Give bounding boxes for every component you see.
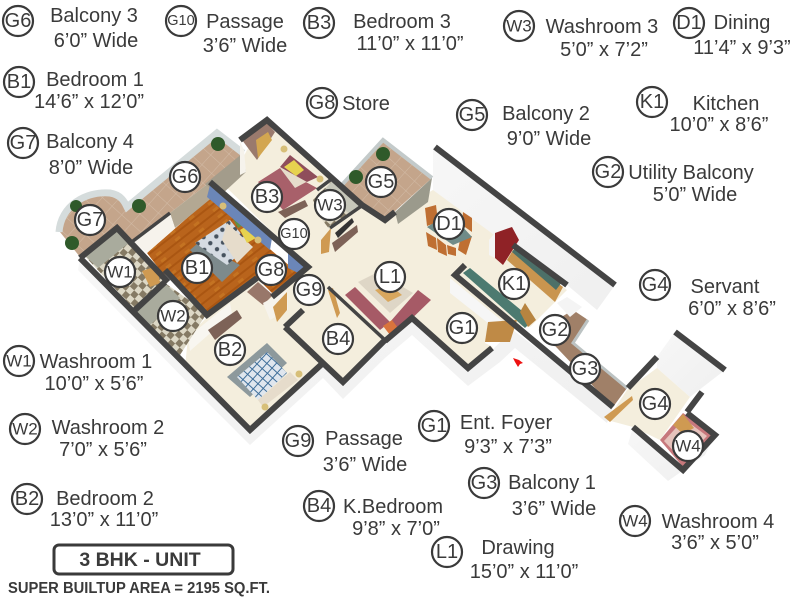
balcony 2 railing [340, 140, 432, 187]
plan marker G6: G6 [172, 166, 198, 188]
kitchen granite back [512, 245, 562, 290]
legend: Washroom 3: W3 [506, 16, 532, 36]
legend: Balcony 1: Balcony 1 [508, 472, 596, 494]
legend: Bedroom 3 [304, 8, 464, 55]
plan marker L1 [375, 262, 405, 292]
legend: Store [307, 88, 390, 118]
plan marker G3: G3 [572, 358, 598, 380]
legend: Passage G9: Passage [325, 428, 403, 450]
legend: Washroom 2: Washroom 2 [52, 417, 164, 439]
bedroom 2 bed [227, 343, 302, 410]
bedroom 2 tv unit [208, 310, 242, 340]
panel: balcony 3 and 4 tile floor [60, 135, 243, 257]
plan marker W4: W4 [675, 436, 701, 456]
legend: Servant: 6’0” x 8’6” [688, 298, 776, 320]
service door [604, 396, 633, 422]
legend: Balcony 4: Balcony 4 [46, 131, 134, 153]
plan marker W4 [673, 431, 703, 461]
plan marker W3 [315, 190, 345, 220]
legend: Washroom 1: 10’0” x 5’6” [45, 373, 143, 395]
legend: Drawing: Drawing [481, 537, 555, 559]
entrance arrow [513, 358, 523, 367]
legend: Balcony 3: Balcony 3 [50, 5, 138, 27]
legend: Washroom 2 [10, 414, 164, 461]
servant door [673, 414, 694, 434]
legend: K.Bedroom: B4 [307, 495, 331, 517]
plan marker G2: G2 [542, 319, 568, 341]
bedroom 1 white wall [133, 213, 175, 253]
legend: Washroom 3 [504, 11, 658, 61]
plan marker G5: G5 [368, 171, 394, 193]
legend: Passage G9: 3’6” Wide [323, 454, 407, 476]
legend: Kitchen: K1 [640, 91, 664, 113]
balcony 2 sliding door [395, 178, 432, 224]
legend: Bedroom 3: B3 [307, 12, 331, 34]
legend: Passage G9 [283, 426, 407, 476]
unit title box: 3 BHK - UNIT [79, 549, 201, 571]
panel: balcony 2 floor [340, 140, 432, 220]
store door [273, 292, 287, 322]
washroom 1 wall [82, 228, 130, 268]
legend: Passage G10: Passage [206, 11, 284, 33]
bedroom 3 bed [258, 146, 324, 218]
plan marker B4: B4 [326, 328, 350, 350]
legend: Bedroom 1: Bedroom 1 [46, 69, 144, 91]
unit title box [54, 545, 233, 574]
legend: Dining: D1 [676, 12, 702, 34]
legend: Balcony 1: G3 [471, 472, 497, 494]
legend: Bedroom 1: B1 [7, 71, 31, 93]
exterior wall faces [78, 147, 725, 481]
bedroom 3 white stub [240, 142, 246, 175]
balcony 4 sliding door [170, 182, 214, 228]
legend: K.Bedroom [304, 491, 443, 540]
legend: Passage G10: 3’6” Wide [203, 35, 287, 57]
legend: Dining: Dining [714, 12, 770, 34]
legend: Servant [640, 270, 776, 320]
plan marker G6 [170, 162, 200, 192]
counter wall face [450, 278, 507, 336]
plan marker G7 [75, 205, 105, 235]
plan marker G10 [279, 219, 309, 249]
legend: Passage G9: G9 [285, 430, 311, 452]
panel: bedroom 2 white wall [188, 303, 232, 351]
dining table [425, 205, 472, 256]
legend: Drawing: L1 [436, 541, 458, 563]
legend: Utility Balcony: Utility Balcony [628, 162, 754, 184]
panel: bedroom 1 wood floor [147, 198, 298, 315]
legend: Balcony 2 [457, 100, 591, 150]
plan marker G4: G4 [642, 393, 668, 415]
legend: Bedroom 2 [12, 484, 158, 531]
plan marker D1 [434, 209, 464, 239]
legend: Utility Balcony: 5’0” Wide [653, 184, 737, 206]
washroom 3 door [321, 228, 331, 254]
plan marker W1 [105, 257, 135, 287]
legend: Kitchen [637, 87, 768, 136]
fridge [495, 227, 519, 265]
plants [65, 137, 390, 250]
legend: K.Bedroom: 9’8” x 7’0” [352, 518, 440, 540]
plan marker B4 [323, 324, 353, 354]
legend: Store: G8 [309, 92, 335, 114]
plan marker G5 [366, 167, 396, 197]
legend: Bedroom 1: 14’6” x 12’0” [34, 91, 144, 113]
plan marker B2: B2 [218, 339, 242, 361]
legend: Ent. Foyer: 9’3” x 7’3” [464, 436, 552, 458]
bedroom 3 wardrobe [242, 123, 275, 160]
panel: washroom 4 floor [660, 413, 715, 467]
panel: servant room floor [607, 368, 690, 440]
legend: Washroom 2: 7’0” x 5’6” [59, 439, 147, 461]
legend: Bedroom 3: Bedroom 3 [353, 11, 451, 33]
living room tv unit [332, 225, 358, 252]
walls [80, 120, 725, 470]
store white wall [263, 290, 288, 320]
legend: Dining: 11’4” x 9’3” [693, 37, 791, 59]
legend: Balcony 3: G6 [5, 10, 31, 32]
legend: Bedroom 2: B2 [15, 488, 39, 510]
fridge side [489, 233, 495, 258]
panel: washroom 1 floor [82, 228, 168, 308]
plan marker G9 [294, 275, 324, 305]
plan marker L1: L1 [379, 266, 401, 288]
store blue wall [288, 250, 308, 273]
legend: Servant: Servant [691, 276, 760, 298]
legend: Balcony 3 [3, 5, 138, 52]
legend: Passage G10 [166, 6, 287, 57]
kitchen counter back [507, 250, 563, 302]
plan marker G2 [540, 315, 570, 345]
legend: Washroom 1: W1 [6, 352, 32, 370]
legend: Passage G10: G10 [167, 13, 195, 29]
kitchen door [520, 303, 536, 327]
legend: Balcony 3: 6’0” Wide [54, 30, 138, 52]
legend: Store: Store [342, 93, 390, 115]
floor plan illustration [59, 120, 725, 481]
plan marker W1: W1 [107, 262, 133, 282]
plan marker K1 [499, 269, 529, 299]
legend: Washroom 1: Washroom 1 [40, 351, 152, 373]
bedroom 3 wardrobe door [256, 132, 272, 158]
plan marker B2 [215, 335, 245, 365]
plan marker G1: G1 [449, 317, 475, 339]
bedroom 1 rug [190, 243, 240, 282]
legend: Bedroom 3: 11’0” x 11’0” [356, 33, 464, 55]
legend: Utility Balcony: G2 [595, 161, 621, 183]
bedroom 1 bed [195, 185, 272, 265]
plan marker G3 [570, 354, 600, 384]
washroom 1 door [142, 266, 160, 287]
plan marker B1 [182, 253, 212, 283]
plan marker B3: B3 [255, 186, 279, 208]
plan marker G8: G8 [258, 259, 284, 281]
legend: Bedroom 2: Bedroom 2 [56, 488, 154, 510]
legend: Washroom 4: 3’6” x 5’0” [671, 532, 759, 554]
super builtup area: SUPER BUILTUP AREA = 2195 SQ.FT. [8, 580, 270, 597]
plan marker G1 [447, 313, 477, 343]
legend: Servant: G4 [642, 274, 668, 296]
legend: Balcony 2: 9’0” Wide [507, 128, 591, 150]
sofa set [345, 272, 431, 335]
plan marker G9: G9 [296, 279, 322, 301]
legend: Drawing: 15’0” x 11’0” [470, 561, 578, 583]
legend: Utility Balcony [593, 157, 754, 206]
utility cabinet [557, 297, 582, 317]
plan marker W2 [158, 301, 188, 331]
legend: Washroom 1 [4, 346, 152, 395]
balcony railing [59, 133, 243, 232]
washroom 3 wall [322, 180, 362, 214]
legend: Balcony 1 [469, 468, 596, 520]
entrance door [485, 320, 517, 342]
legend: Balcony 4: G7 [10, 132, 36, 154]
plan marker G4 [640, 389, 670, 419]
legend: Bedroom 1 [4, 67, 144, 113]
panel: utility balcony and balcony 1 floor [540, 310, 627, 407]
plan marker G10: G10 [280, 226, 308, 242]
panel: bedroom 4 floor [285, 287, 385, 382]
legend: Washroom 3: Washroom 3 [546, 16, 658, 38]
legend: Ent. Foyer: Ent. Foyer [460, 412, 552, 434]
legend: Dining [674, 8, 791, 59]
legend: Bedroom 2: 13’0” x 11’0” [50, 509, 158, 531]
legend: Drawing [432, 537, 578, 583]
plan marker G8 [256, 255, 286, 285]
store wardrobe [247, 282, 273, 305]
main floor: bedroom 3, living, dining, kitchen [227, 122, 567, 368]
legend: Washroom 4: W4 [622, 512, 648, 530]
utility railing [573, 320, 627, 388]
washroom 4 inner [664, 419, 707, 461]
legend: Ent. Foyer [419, 411, 552, 458]
panel: washroom 3 floor [313, 180, 362, 230]
washroom 2 wall [135, 283, 180, 325]
legend: Kitchen: Kitchen [693, 93, 759, 115]
plan marker B1: B1 [185, 257, 209, 279]
legend: Washroom 3: 5’0” x 7’2” [560, 39, 648, 61]
legend: Balcony 1: 3’6” Wide [512, 498, 596, 520]
bedroom 4 door [328, 288, 340, 318]
legend: Balcony 4 [8, 128, 134, 179]
plan marker W3: W3 [317, 196, 343, 214]
legend: Kitchen: 10’0” x 8’6” [670, 114, 768, 136]
legend: K.Bedroom: K.Bedroom [343, 496, 443, 518]
panel: bedroom 2 floor [185, 278, 323, 430]
legend: Washroom 4: Washroom 4 [662, 511, 774, 533]
legend: Balcony 2: G5 [459, 104, 485, 126]
legend: Balcony 4: 8’0” Wide [49, 157, 133, 179]
plan marker D1: D1 [436, 213, 462, 235]
legend: Washroom 2: W2 [12, 420, 38, 438]
balcony 3 sliding door [205, 153, 246, 195]
living room tv [335, 218, 354, 238]
legend: Balcony 2: Balcony 2 [502, 103, 590, 125]
legend: Washroom 4 [620, 506, 774, 554]
kitchen counter front [463, 268, 533, 328]
plan marker K1: K1 [502, 273, 526, 295]
legend: Ent. Foyer: G1 [421, 415, 447, 437]
plan marker W2: W2 [160, 306, 186, 326]
plan marker G7: G7 [77, 209, 103, 231]
plan marker B3 [252, 182, 282, 212]
panel: washroom 2 floor [135, 283, 207, 355]
